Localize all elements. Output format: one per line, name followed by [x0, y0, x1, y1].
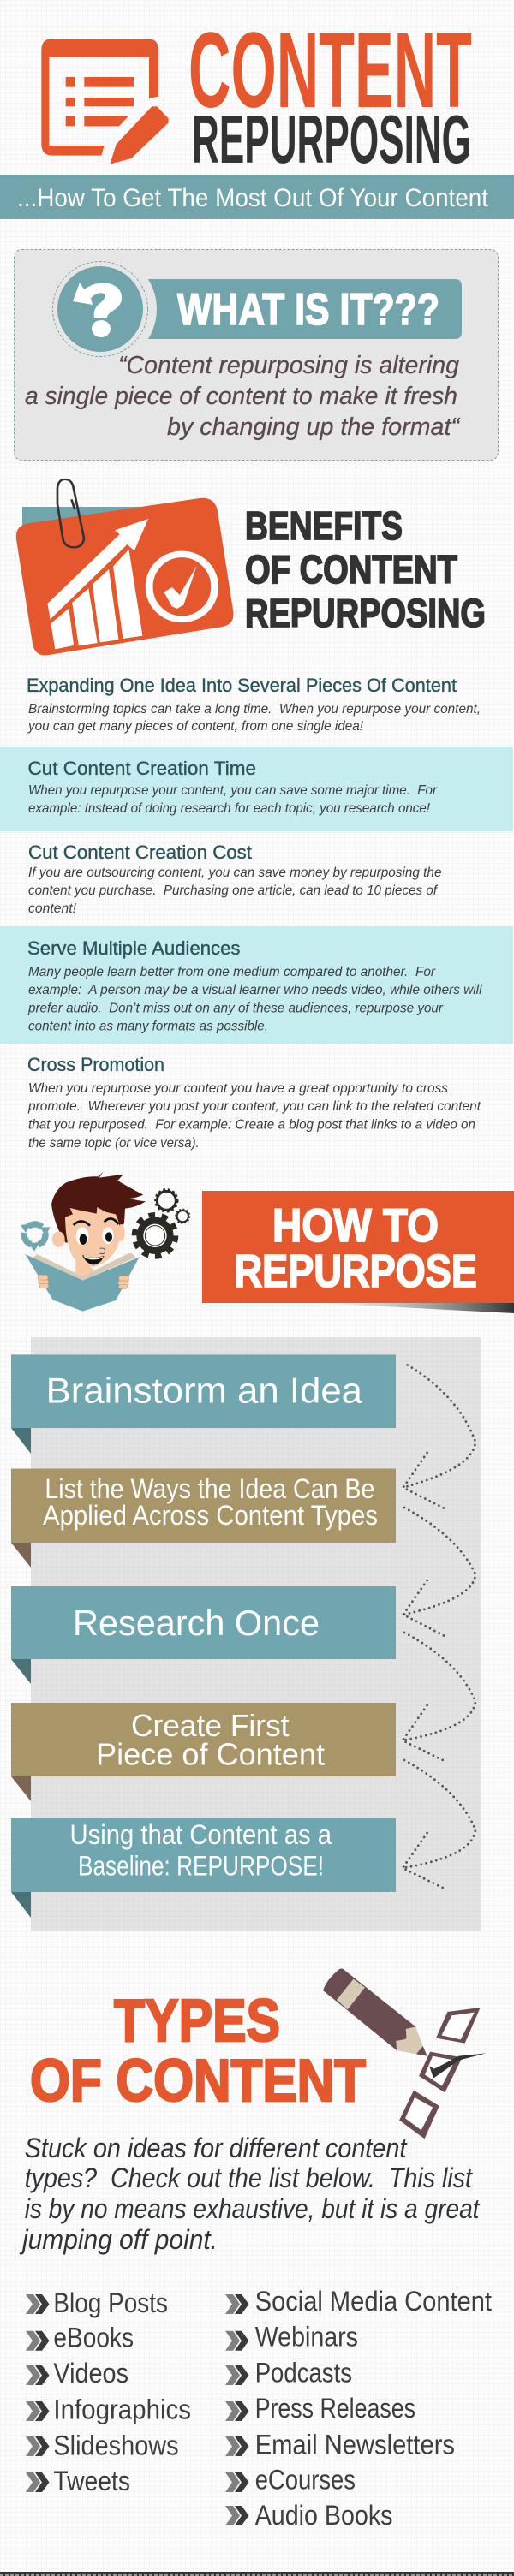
arrows: dotted step connectors [403, 1365, 475, 1889]
benefit: cut creation time [0, 747, 513, 831]
benefit: cross promotion: Cross Promotion [27, 1054, 164, 1075]
benefit: cut creation cost: content! [28, 901, 77, 916]
list: left column [26, 2287, 191, 2496]
heading: types of content [30, 1987, 366, 2114]
list: right column [225, 2286, 492, 2531]
footer bar [0, 2572, 514, 2576]
intro paragraph: types? Check out the list below. This list [25, 2163, 473, 2193]
benefit: cut creation cost: Cut Content Creation Cost [28, 842, 252, 863]
step 3: research once: Research Once [73, 1603, 320, 1643]
icon: open book [25, 1253, 140, 1312]
benefit: serve multiple audiences: content into as many formats as possible. [28, 1020, 268, 1034]
benefit: cross promotion: When you repurpose your content you have a great opportunity to cross [28, 1081, 448, 1096]
intro paragraph [19, 2133, 480, 2255]
heading: benefits: OF CONTENT [245, 547, 457, 592]
step 5: repurpose: Using that Content as a [70, 1819, 332, 1850]
heading banner [44, 253, 462, 366]
panel: steps background [31, 1337, 481, 1931]
step 4: create first piece: Create First [131, 1708, 290, 1743]
list: right column: Email Newsletters [255, 2430, 455, 2460]
step 1: brainstorm [11, 1354, 396, 1454]
step 5: repurpose: Baseline: REPURPOSE! [78, 1851, 324, 1882]
panel: what is it [14, 250, 499, 461]
benefit: cross promotion: that you repurposed. For example: Create a blog post that links to a video on [28, 1118, 475, 1133]
subtitle band: ...How To Get The Most Out Of Your Content [17, 184, 489, 212]
list: left column: Videos [53, 2358, 128, 2389]
heading: types of content: TYPES [114, 1987, 280, 2054]
list: left column: Slideshows [53, 2430, 179, 2461]
intro paragraph: jumping off point. [19, 2224, 218, 2255]
heading: how to repurpose [202, 1191, 514, 1313]
step 4: create first piece [11, 1703, 396, 1801]
step 2: list the ways: Applied Across Content Types [43, 1500, 378, 1531]
list: left column: Blog Posts [53, 2287, 168, 2318]
icon: gears [134, 1190, 189, 1256]
benefit: expanding one idea [27, 675, 481, 734]
benefit: expanding one idea: Expanding One Idea Into Several Pieces Of Content [27, 675, 457, 696]
benefit: cut creation time: When you repurpose your content, you can save some major time. For [28, 783, 438, 798]
heading: types of content: OF CONTENT [30, 2047, 366, 2114]
benefit: serve multiple audiences: example: A person may be a visual learner who needs video, while others will [28, 983, 482, 997]
intro paragraph: Stuck on ideas for different content [25, 2133, 408, 2163]
heading: benefits [245, 503, 486, 635]
benefit: cut creation cost [28, 842, 442, 916]
list: right column: Audio Books [255, 2500, 392, 2531]
benefit: serve multiple audiences [0, 926, 513, 1044]
benefit: serve multiple audiences: Many people learn better from one medium compared to another. For [28, 965, 436, 979]
step 2: list the ways: List the Ways the Idea Can Be [45, 1473, 374, 1504]
list: right column: Press Releases [255, 2393, 415, 2424]
benefit: cut creation cost: If you are outsourcing content, you can save money by repurposing the [28, 866, 442, 880]
step 5: repurpose [11, 1818, 396, 1918]
benefit: cross promotion: the same topic (or vice versa). [28, 1136, 200, 1151]
benefit: cut creation time: Cut Content Creation Time [27, 758, 256, 779]
step 4: create first piece: Piece of Content [96, 1737, 325, 1772]
quote: by changing up the format“ [167, 413, 460, 441]
hair and face [51, 1171, 146, 1278]
heading: benefits: BENEFITS [245, 503, 403, 548]
benefit: cut creation time: example: Instead of doing research for each topic, you research once! [28, 801, 431, 816]
subtitle band [0, 175, 514, 219]
step 1: brainstorm: Brainstorm an Idea [46, 1371, 363, 1411]
quote: “Content repurposing is altering [118, 352, 459, 379]
benefit: serve multiple audiences: prefer audio. Don’t miss out on any of these audiences, repurpose your [27, 1002, 444, 1015]
benefit: cut creation cost: content you purchase. Purchasing one article, can lead to 10 pieces of [28, 883, 438, 898]
list: left column: Tweets [53, 2466, 130, 2496]
benefit: serve multiple audiences: Serve Multiple Audiences [27, 937, 240, 959]
benefit: cross promotion: promote. Wherever you post your content, you can link to the related content [27, 1099, 481, 1114]
list: right column: Webinars [255, 2322, 358, 2353]
list: right column: eCourses [255, 2465, 356, 2496]
benefits header [16, 479, 486, 655]
icon: question mark [73, 283, 122, 337]
list: right column: Social Media Content [255, 2286, 492, 2317]
list: right column: Podcasts [255, 2358, 352, 2389]
benefit: cross promotion [27, 1054, 481, 1151]
heading: how to repurpose: HOW TO [272, 1199, 439, 1252]
icon: document with pencil [41, 39, 169, 164]
benefit: expanding one idea: Brainstorming topics can take a long time. When you repurpose your content, [28, 702, 481, 717]
quote [25, 352, 460, 441]
quote: a single piece of content to make it fresh [25, 383, 457, 410]
heading banner: WHAT IS IT??? [177, 285, 439, 335]
step 2: list the ways [11, 1469, 396, 1568]
icon: pencil and checkboxes [323, 1968, 487, 2139]
icon: recycle arrows [21, 1223, 50, 1252]
icon: boy reading book with gears [21, 1171, 189, 1312]
list: left column: eBooks [53, 2323, 134, 2353]
list: left column: Infographics [53, 2395, 191, 2425]
header [41, 11, 472, 177]
benefit: expanding one idea: you can get many pieces of content, from one single idea! [27, 719, 364, 734]
icon: chart card with paperclip [16, 479, 233, 655]
step 3: research once [11, 1586, 396, 1684]
